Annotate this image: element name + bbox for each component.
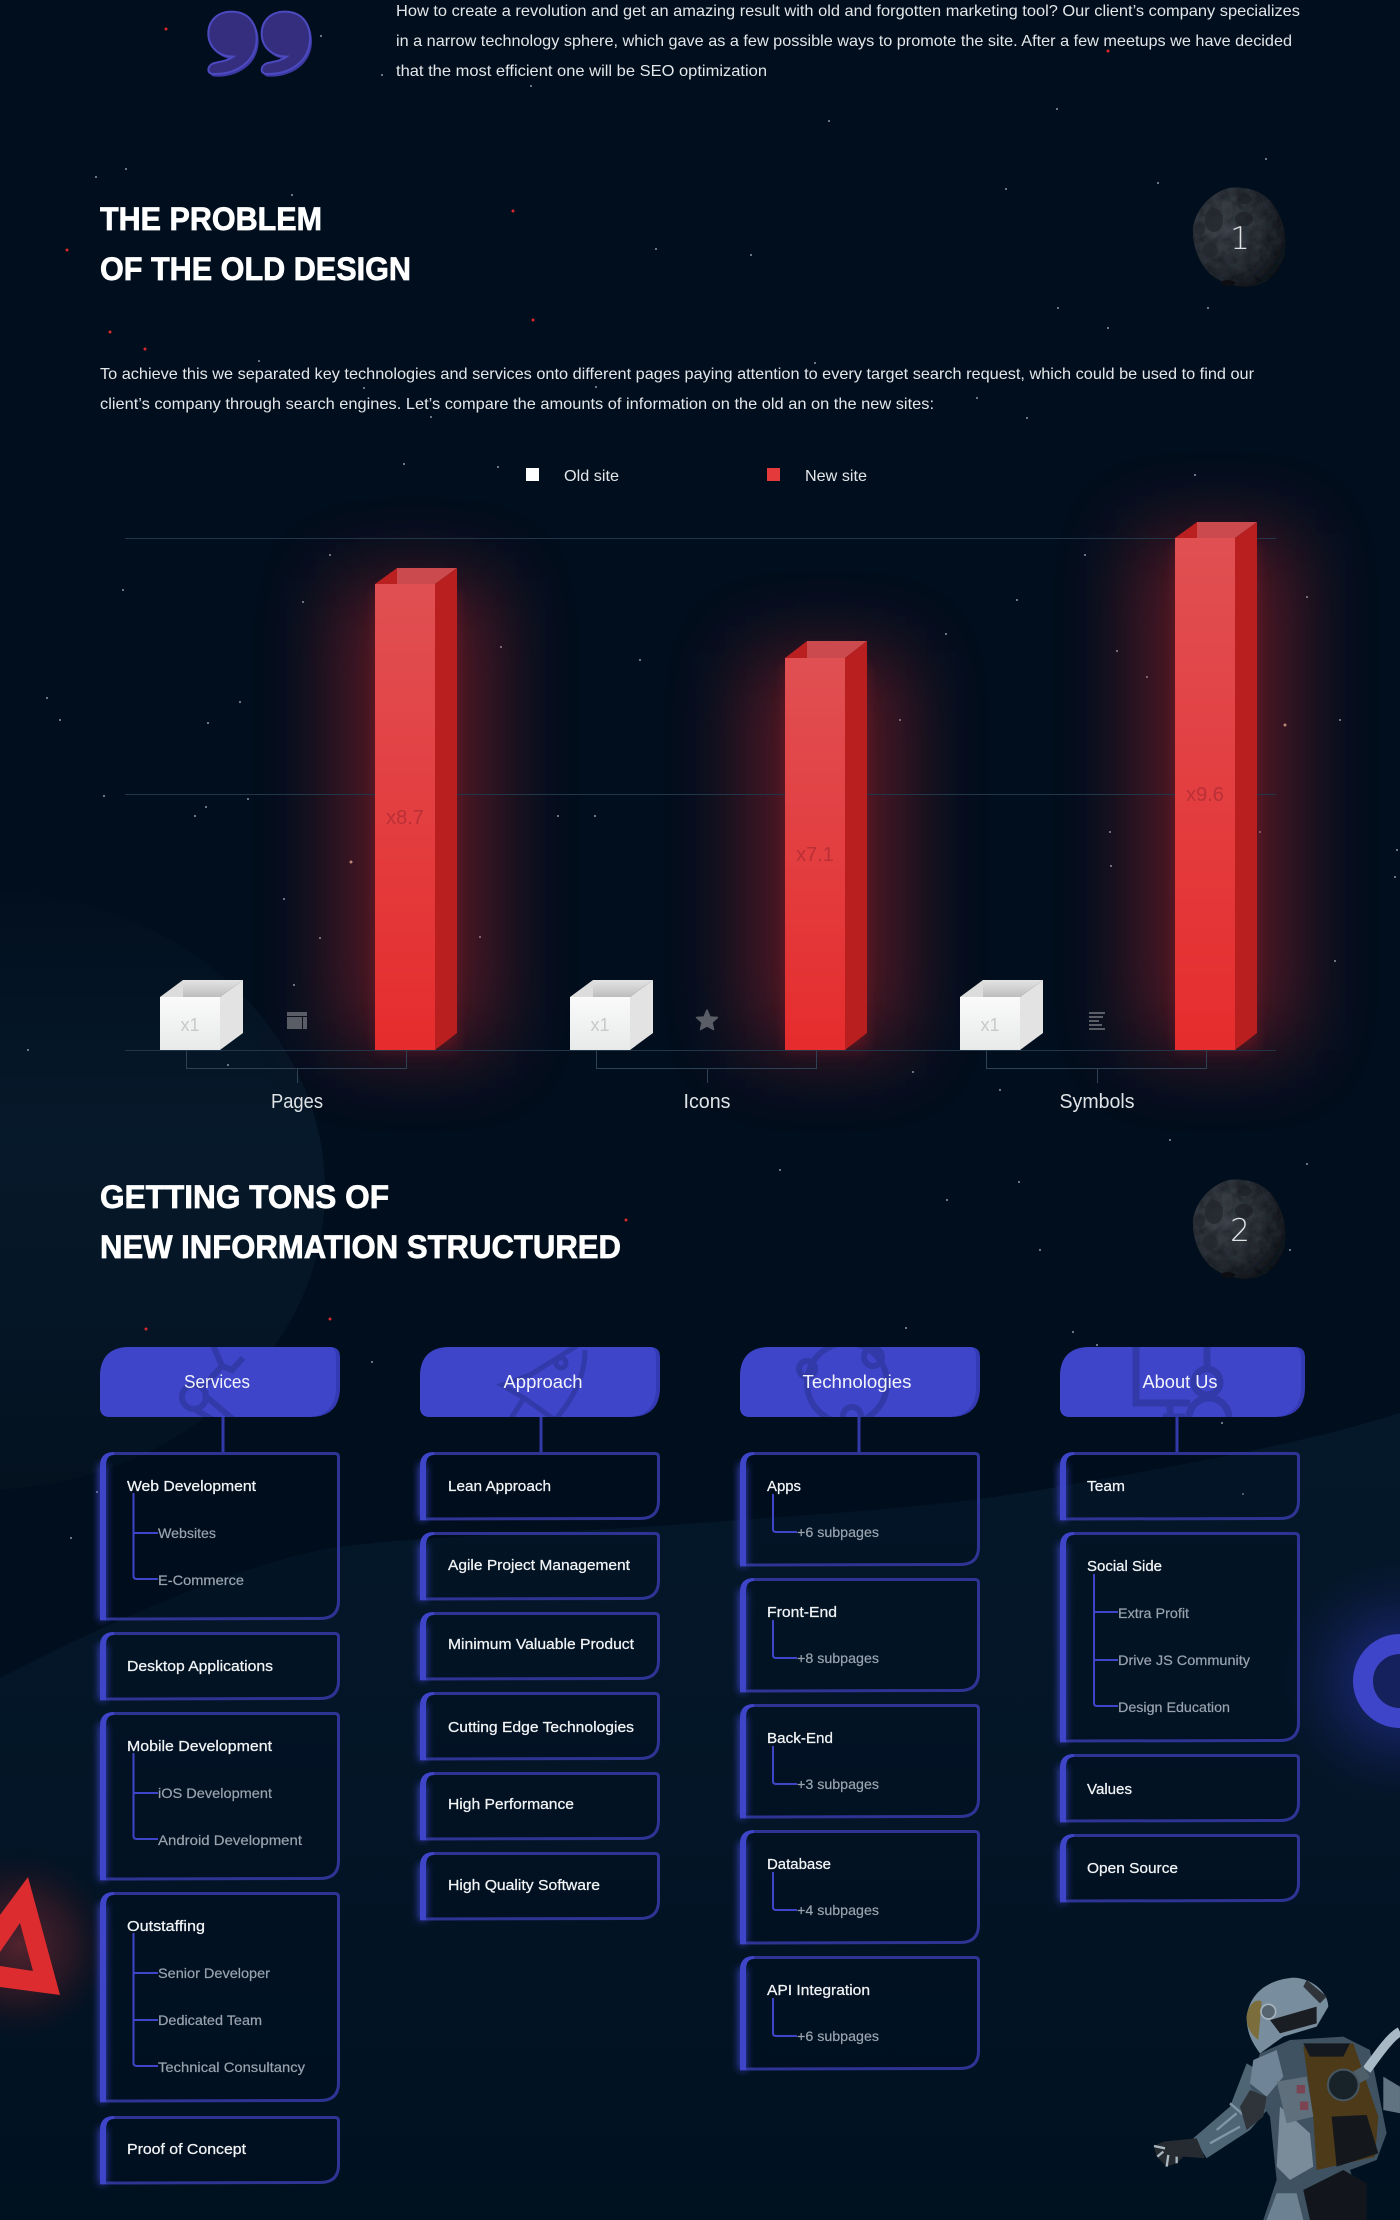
item: web development: Websites <box>158 1525 216 1541</box>
column: services <box>99 1345 340 2184</box>
heading: the problem of the old design <box>100 201 411 287</box>
red triangle with glow <box>0 1850 115 2040</box>
item: desktop applications: Desktop Applications <box>127 1658 273 1675</box>
item: agile project management: Agile Project Management <box>448 1557 631 1574</box>
grid lines <box>125 538 1276 1050</box>
item: web development: E-Commerce <box>158 1572 244 1588</box>
item: api integration: API Integration <box>767 1982 870 1999</box>
heading: getting tons of new information structured: NEW INFORMATION STRUCTURED <box>100 1229 621 1265</box>
item: outstaffing <box>99 1892 338 2102</box>
item: api integration <box>739 1956 978 2070</box>
column: technologies <box>739 1343 980 2070</box>
item: database <box>739 1830 978 1944</box>
item: database: Database <box>767 1856 831 1873</box>
item: minimum valuable product <box>419 1612 658 1680</box>
item: proof of concept <box>99 2116 338 2184</box>
bar: x9.6: x9.6 <box>1186 784 1224 806</box>
item: open source <box>1059 1834 1298 1902</box>
item: social side <box>1059 1532 1298 1742</box>
item: api integration: +6 subpages <box>797 2028 879 2044</box>
header: approach <box>420 1345 660 1420</box>
icon: asteroid number 1 <box>1193 188 1286 287</box>
bar: x7.1: x7.1 <box>796 844 834 866</box>
item: lean approach: Lean Approach <box>448 1478 551 1495</box>
icon: text lines <box>1089 1012 1105 1030</box>
bar: x7.1 <box>785 641 867 1050</box>
bar: x8.7 <box>375 568 457 1050</box>
item: web development: Web Development <box>127 1478 257 1495</box>
item: back-end <box>739 1704 978 1818</box>
item: open source: Open Source <box>1087 1860 1178 1877</box>
item: lean approach <box>419 1452 658 1520</box>
item: high performance: High Performance <box>448 1796 574 1813</box>
column: approach <box>419 1345 660 1920</box>
bar: x8.7: x8.7 <box>386 807 424 829</box>
item: cutting edge technologies <box>419 1692 658 1760</box>
bracket <box>186 1051 406 1083</box>
blue ring with glow <box>1275 1556 1400 1806</box>
item: desktop applications <box>99 1632 338 1700</box>
header: about us: About Us <box>1142 1372 1218 1392</box>
item: values: Values <box>1087 1781 1132 1798</box>
bracket <box>986 1051 1206 1083</box>
item: front-end: +8 subpages <box>797 1650 879 1666</box>
item: mobile development: Mobile Development <box>127 1738 273 1755</box>
item: mobile development: Android Development <box>158 1832 302 1848</box>
illustration: astronaut <box>1154 1978 1400 2220</box>
item: high performance <box>419 1772 658 1840</box>
item: team: Team <box>1087 1478 1125 1495</box>
item: high quality software: High Quality Software <box>448 1877 600 1894</box>
item: team <box>1059 1452 1298 1520</box>
item: front-end: Front-End <box>767 1604 837 1621</box>
star field <box>28 29 1397 1538</box>
item: front-end <box>739 1578 978 1692</box>
item: back-end: +3 subpages <box>797 1776 879 1792</box>
item: minimum valuable product: Minimum Valuable Product <box>448 1636 635 1653</box>
item: outstaffing: Outstaffing <box>127 1918 205 1935</box>
header: services: Services <box>184 1372 250 1392</box>
background planet: left <box>0 890 325 1490</box>
bar chart <box>125 522 1296 1113</box>
icon: pages <box>287 1012 307 1029</box>
item: web development <box>99 1452 338 1620</box>
bracket <box>596 1051 816 1083</box>
column: about us <box>1059 1345 1305 1902</box>
paragraph <box>100 366 1255 413</box>
item: apps: +6 subpages <box>797 1524 879 1540</box>
label: Pages <box>271 1091 323 1113</box>
header: technologies: Technologies <box>802 1372 912 1392</box>
item: agile project management <box>419 1532 658 1600</box>
group: symbols <box>960 522 1257 1113</box>
icon: asteroid number 2: 2 <box>1230 1213 1250 1249</box>
group: symbols: x1 <box>980 1015 1000 1035</box>
background planet: lower horizon <box>0 1413 1400 2220</box>
item: cutting edge technologies: Cutting Edge Technologies <box>448 1719 634 1736</box>
item: social side: Social Side <box>1087 1558 1162 1575</box>
item: proof of concept: Proof of Concept <box>127 2141 247 2158</box>
item: social side: Drive JS Community <box>1118 1652 1250 1668</box>
heading: getting tons of new information structured: GETTING TONS OF <box>100 1179 389 1215</box>
item: apps: Apps <box>767 1478 801 1495</box>
heading: the problem of the old design: OF THE OLD DESIGN <box>100 251 411 287</box>
heading: getting tons of new information structured <box>100 1179 621 1265</box>
icon: asteroid number 2 <box>1193 1180 1286 1279</box>
item: high quality software <box>419 1852 658 1920</box>
item: mobile development: iOS Development <box>158 1785 272 1801</box>
item: outstaffing: Dedicated Team <box>158 2012 262 2028</box>
group: pages: x1 <box>180 1015 200 1035</box>
item: database: +4 subpages <box>797 1902 879 1918</box>
icon: quotation mark <box>208 12 312 77</box>
heading: the problem of the old design: THE PROBLEM <box>100 201 322 237</box>
intro text: in a narrow technology sphere, which gave as a few possible ways to promote the site. After a few meetups we have decided <box>396 33 1292 50</box>
group: icons <box>570 641 867 1113</box>
header: services <box>100 1347 340 1417</box>
bar: x9.6 <box>1175 522 1257 1050</box>
item: apps <box>739 1452 978 1566</box>
group: pages <box>160 568 457 1113</box>
legend: Old site <box>564 468 619 485</box>
header: about us <box>1060 1347 1305 1417</box>
legend: New site <box>805 468 867 485</box>
item: mobile development <box>99 1712 338 1880</box>
item: back-end: Back-End <box>767 1730 833 1747</box>
icon: star <box>696 1010 718 1030</box>
paragraph: client’s company through search engines. Let’s compare the amounts of information on the old an on the new sites: <box>100 396 934 413</box>
header: technologies <box>740 1347 980 1417</box>
group: icons: x1 <box>590 1015 610 1035</box>
item: outstaffing: Senior Developer <box>158 1965 270 1981</box>
paragraph: To achieve this we separated key technologies and services onto different pages paying attention to every target search request, which could be used to find our <box>100 366 1255 383</box>
label: Symbols <box>1060 1091 1134 1113</box>
item: social side: Design Education <box>1118 1699 1230 1715</box>
label: Icons <box>684 1091 730 1113</box>
icon: asteroid number 1: 1 <box>1230 221 1250 257</box>
bar glows <box>336 534 1296 1050</box>
intro text: that the most efficient one will be SEO optimization <box>396 63 767 80</box>
header: approach: Approach <box>504 1372 582 1392</box>
intro text <box>396 3 1300 80</box>
legend <box>526 468 867 485</box>
intro text: How to create a revolution and get an amazing result with old and forgotten marketing tool? Our client’s company specializes <box>396 3 1300 20</box>
item: outstaffing: Technical Consultancy <box>158 2059 305 2075</box>
item: values <box>1059 1754 1298 1822</box>
item: social side: Extra Profit <box>1118 1605 1189 1621</box>
